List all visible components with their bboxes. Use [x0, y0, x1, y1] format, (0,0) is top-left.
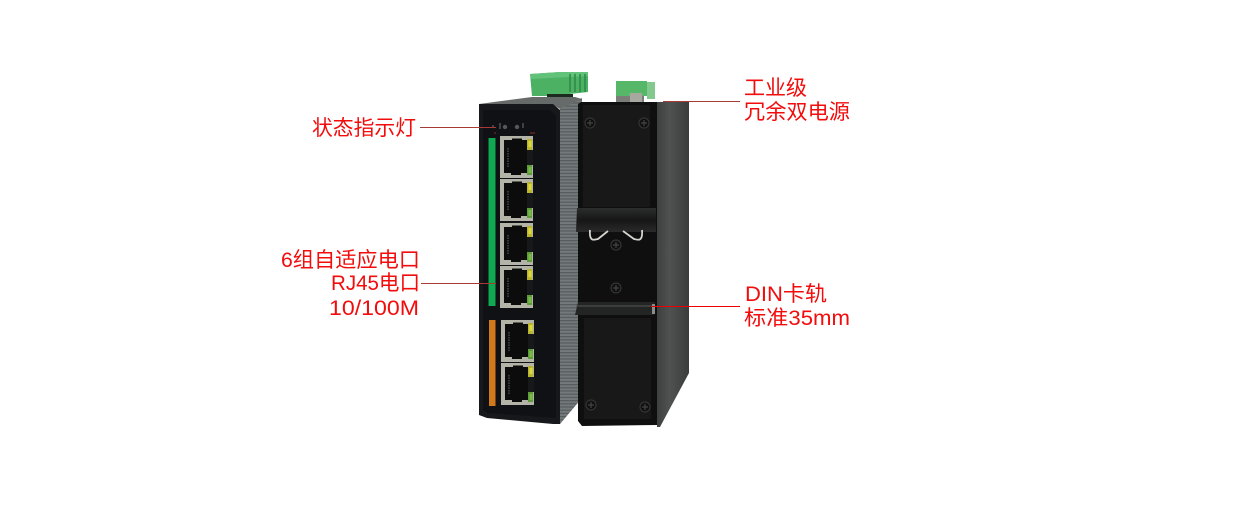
status LEDs	[493, 123, 535, 133]
rear panel	[578, 102, 657, 426]
DIN clip	[575, 302, 655, 315]
label: DIN rail	[744, 283, 850, 330]
green power terminal (rear unit)	[616, 81, 655, 102]
label: DIN rail: DIN卡轨	[745, 283, 827, 306]
DIN rail	[576, 208, 656, 232]
label: RJ45 ports	[281, 249, 420, 320]
label: RJ45 ports: RJ45电口	[331, 272, 420, 295]
top edge	[479, 97, 582, 109]
green port strip	[488, 138, 496, 306]
side ribbed heat sink	[560, 98, 582, 424]
RJ45 ports group 2	[501, 320, 534, 405]
RJ45 ports group 1	[500, 136, 533, 308]
device: front view switch	[479, 72, 588, 424]
label: status indicator: 状态指示灯	[312, 117, 416, 140]
callout line: RJ45 ports	[421, 282, 496, 284]
mounting screws	[585, 118, 650, 412]
callout line: power	[663, 100, 740, 102]
label: dual power: 冗余双电源	[744, 101, 850, 124]
label: dual power	[744, 77, 850, 124]
orange port strip	[489, 320, 496, 406]
gray side face	[657, 102, 689, 427]
callout line: DIN rail	[651, 306, 740, 308]
label: RJ45 ports: 6组自适应电口	[281, 249, 420, 272]
label: DIN rail: 标准35mm	[744, 307, 850, 330]
label: dual power: 工业级	[744, 77, 807, 100]
callout line: status LEDs	[420, 126, 496, 128]
front panel	[479, 104, 560, 424]
device: rear view with DIN rail	[575, 81, 689, 427]
green power terminal (front unit)	[530, 72, 588, 100]
label: RJ45 ports: 10/100M	[329, 297, 419, 320]
spring clips	[590, 230, 642, 240]
